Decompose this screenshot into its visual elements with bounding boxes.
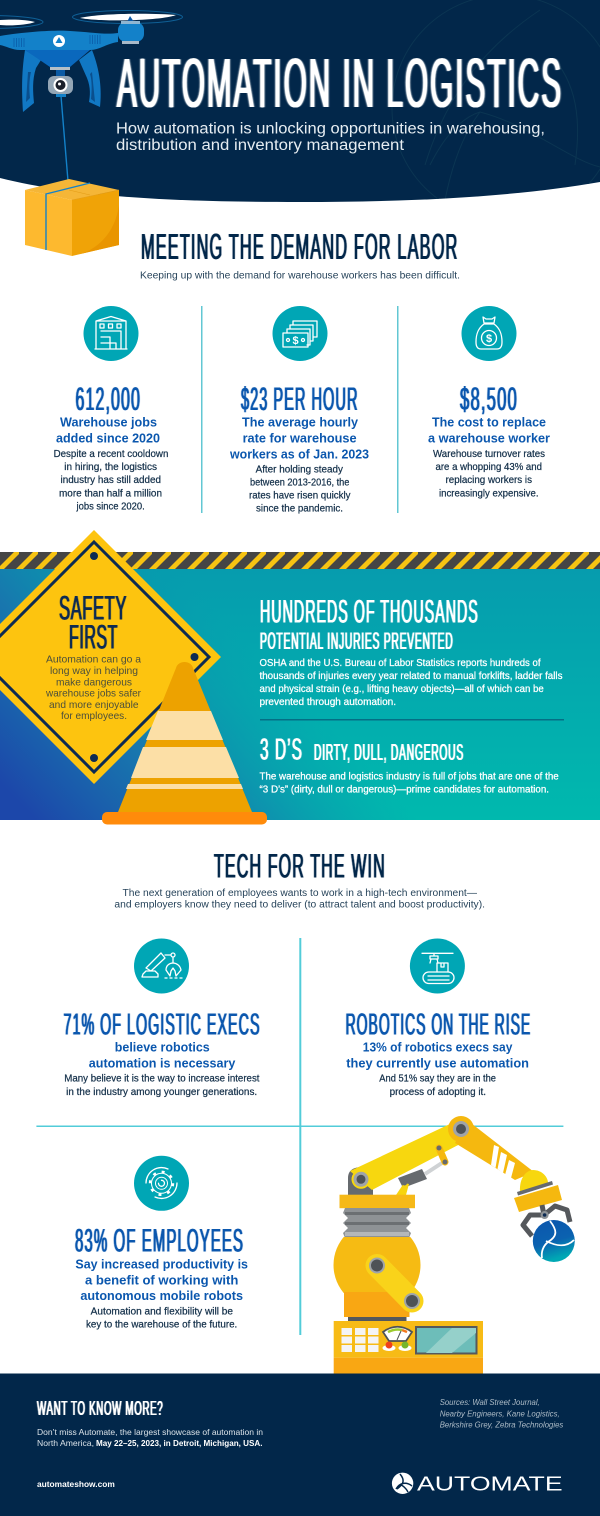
control console <box>334 1321 483 1374</box>
section intro text <box>114 888 485 910</box>
footer background <box>0 1374 600 1516</box>
text: $23 PER HOUR <box>241 381 358 417</box>
description: key to the warehouse of the future. <box>86 1320 237 1331</box>
description <box>64 1074 260 1098</box>
icon: conveyor <box>410 938 465 994</box>
text: TECH FOR THE WIN <box>214 847 386 885</box>
subhead: Warehouse jobs <box>60 415 157 430</box>
OSHA text block: and physical strain (e.g., lifting heavy objects)—all of which can be <box>260 684 544 695</box>
robot piston <box>396 1161 445 1195</box>
console screen <box>416 1327 476 1354</box>
console buttons <box>382 1342 412 1351</box>
description: jobs since 2020. <box>76 501 145 512</box>
subhead: added since 2020 <box>56 431 160 446</box>
sources <box>440 1397 563 1429</box>
logo mark <box>392 1473 413 1494</box>
traffic cone <box>102 662 267 824</box>
icon: cash <box>272 306 328 361</box>
robot claw hub <box>541 1211 549 1219</box>
subhead: rate for warehouse <box>243 431 357 446</box>
column dividers <box>201 306 398 513</box>
sign: safety first: SAFETY <box>59 589 127 627</box>
description: Warehouse turnover rates <box>433 449 545 460</box>
drone body <box>0 31 118 67</box>
footer text: Don’t miss Automate, the largest showcase of automation in <box>37 1427 263 1437</box>
OSHA text block: thousands of injuries every year related to manual forklifts, ladder falls <box>260 671 563 682</box>
console keypad <box>342 1328 378 1352</box>
robot torso <box>334 1237 420 1321</box>
subhead: automation is necessary <box>89 1055 236 1070</box>
subtitle: How automation is unlocking opportunities in warehousing, <box>116 120 545 138</box>
description: more than half a million <box>59 488 162 499</box>
sign text <box>45 654 141 722</box>
panel: warehouse jobs <box>54 306 168 512</box>
OSHA text block <box>260 658 563 708</box>
description: Despite a recent cooldown <box>54 449 168 460</box>
robot lower link <box>369 1258 420 1309</box>
subhead: believe robotics <box>115 1040 210 1055</box>
subhead <box>89 1040 236 1070</box>
subhead <box>428 415 550 446</box>
subhead <box>229 415 369 461</box>
text: 83% OF EMPLOYEES <box>75 1223 244 1259</box>
stat: $8,500: $8,500 <box>460 381 518 417</box>
3 D's text block: The warehouse and logistics industry is full of jobs that are one of the <box>260 771 559 782</box>
description: industry has still added <box>60 475 161 486</box>
icon: gear <box>134 1156 189 1211</box>
panel: replacement cost <box>428 306 550 499</box>
panel: employees <box>75 1156 248 1331</box>
sign text: make dangerous <box>56 676 132 688</box>
robot forearm <box>455 1120 534 1180</box>
drone legs <box>22 50 101 112</box>
panel: hourly rate <box>229 306 369 514</box>
robot shoulder mount <box>348 1167 373 1195</box>
subtitle <box>116 120 545 154</box>
hazard stripe band <box>0 552 600 569</box>
description: And 51% say they are in the <box>379 1074 496 1085</box>
subhead: they currently use automation <box>346 1055 529 1070</box>
section intro text: and employers know they need to deliver (to attract talent and boost productivity). <box>114 900 485 910</box>
sources: Sources: Wall Street Journal, <box>440 1397 540 1407</box>
robot head <box>514 1181 562 1212</box>
subhead: autonomous mobile robots <box>80 1288 243 1303</box>
description <box>249 464 351 514</box>
robot link <box>436 1146 448 1164</box>
section intro text: Keeping up with the demand for warehouse workers has been difficult. <box>140 270 460 282</box>
OSHA text block: prevented through automation. <box>260 697 396 708</box>
description: in the industry among younger generations. <box>66 1087 257 1098</box>
description <box>379 1074 496 1098</box>
drone illustration <box>0 10 182 181</box>
sign text: for employees. <box>61 710 127 722</box>
sources: Berkshire Grey, Zebra Technologies <box>440 1419 563 1429</box>
sign heading: FIRST <box>69 619 118 657</box>
subhead: The average hourly <box>242 415 359 430</box>
console gauge <box>383 1327 412 1341</box>
subhead <box>75 1257 248 1303</box>
description: in hiring, the logistics <box>64 462 157 473</box>
robot wrist <box>520 1170 548 1192</box>
description <box>54 449 168 512</box>
watermark logo <box>392 0 600 221</box>
description: After holding steady <box>256 464 343 476</box>
icon: money bag: $ <box>486 333 492 345</box>
icon: cash: $ <box>292 335 299 347</box>
drone rotors <box>0 10 182 28</box>
sign heading <box>59 589 127 657</box>
subhead: a warehouse worker <box>428 431 550 446</box>
footer text: May 22–25, 2023, in Detroit, Michigan, USA. <box>96 1438 262 1448</box>
logo wordmark: AUTOMATE <box>417 1473 563 1496</box>
subhead <box>346 1040 529 1070</box>
subhead: a benefit of working with <box>85 1272 238 1287</box>
3 D's text block: “3 D’s” (dirty, dull or dangerous)—prime candidates for automation. <box>260 784 549 795</box>
footer text: North America, <box>37 1438 94 1448</box>
3 D's text block <box>260 771 559 795</box>
panel: warehouse jobs: 612,000 <box>76 381 141 417</box>
description: replacing workers is <box>446 475 532 486</box>
text: 71% OF LOGISTIC EXECS <box>64 1006 260 1041</box>
description: between 2013-2016, the <box>250 478 349 488</box>
description: Automation and flexibility will be <box>91 1306 233 1317</box>
subtitle: distribution and inventory management <box>116 137 405 154</box>
robot claw <box>523 1205 570 1236</box>
header background <box>0 0 600 221</box>
sign text: long way in helping <box>50 665 138 677</box>
panel: robotics on the rise <box>346 938 531 1098</box>
sign text: Automation can go a <box>46 654 141 666</box>
OSHA text block: OSHA and the U.S. Bureau of Labor Statistics reports hundreds of <box>260 658 541 669</box>
description <box>86 1306 237 1331</box>
robot arm illustration <box>334 1116 575 1374</box>
drone motor <box>118 16 144 44</box>
held logo ball <box>533 1220 575 1262</box>
cardboard box <box>25 179 119 256</box>
description: process of adopting it. <box>390 1087 486 1098</box>
subhead <box>56 415 160 446</box>
description: rates have risen quickly <box>249 490 351 502</box>
icon: robot arm <box>134 938 189 994</box>
sign text: warehouse jobs safer <box>45 688 141 700</box>
robot bellows <box>343 1208 411 1238</box>
icon: money bag <box>462 306 516 361</box>
sign rivets <box>90 552 198 762</box>
drone cable <box>61 96 68 181</box>
drone camera <box>48 67 73 97</box>
footer text <box>37 1427 263 1448</box>
subhead: Say increased productivity is <box>75 1257 248 1272</box>
robot upper arm <box>350 1123 462 1190</box>
quadrant dividers <box>36 938 563 1335</box>
safety panel background <box>0 569 600 820</box>
subhead: 13% of robotics execs say <box>363 1040 513 1055</box>
description: are a whopping 43% and <box>436 462 542 473</box>
Automate logo <box>392 1473 563 1496</box>
icon: warehouse <box>84 306 138 361</box>
description <box>433 449 545 499</box>
section intro text: The next generation of employees wants to work in a high-tech environment— <box>122 888 477 899</box>
sources: Nearby Engineers, Kane Logistics, <box>440 1408 560 1418</box>
sign text: and more enjoyable <box>49 699 139 711</box>
sign: safety first <box>0 530 221 784</box>
subhead: The cost to replace <box>432 415 546 430</box>
panel: logistic execs <box>64 938 260 1098</box>
description: increasingly expensive. <box>439 488 538 499</box>
website: automateshow.com <box>37 1479 115 1489</box>
robot shoulder plate <box>340 1195 415 1208</box>
robot joints <box>352 1116 474 1189</box>
text: WANT TO KNOW MORE? <box>37 1397 163 1420</box>
description: Many believe it is the way to increase interest <box>64 1074 260 1085</box>
text: 3 D’S <box>260 731 303 766</box>
description: since the pandemic. <box>256 504 343 514</box>
subhead: workers as of Jan. 2023 <box>229 446 369 461</box>
